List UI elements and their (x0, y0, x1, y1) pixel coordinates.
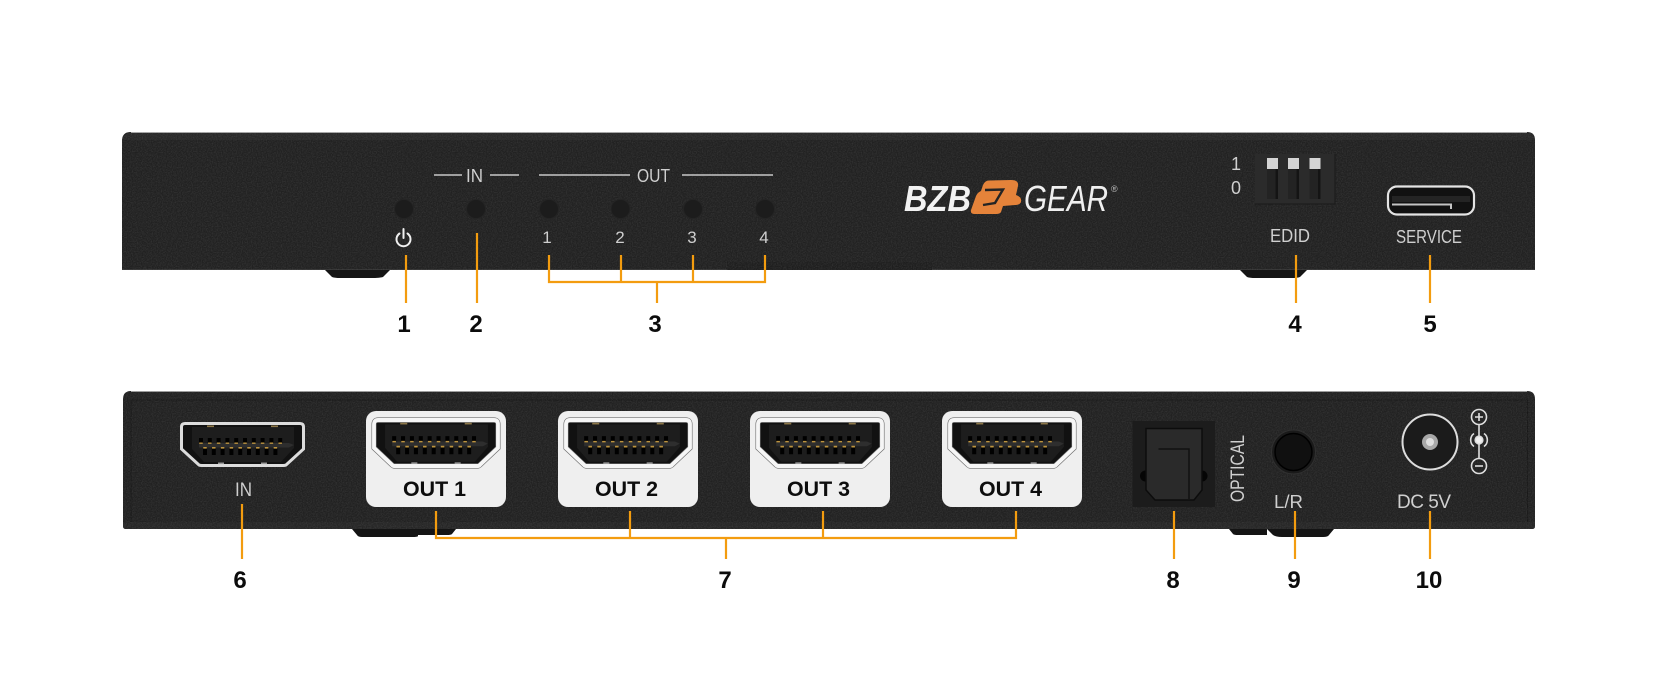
callout 10 (1416, 511, 1442, 594)
logo: BZB 2 GEAR: BZB (904, 178, 971, 219)
callout 8: 8 (1166, 567, 1180, 594)
callout 8 (1166, 511, 1180, 594)
icon: power (397, 229, 410, 246)
service USB port (1388, 186, 1474, 214)
DC power jack (1402, 414, 1458, 470)
card: OUT 1 (366, 411, 506, 507)
callout 6 (233, 504, 247, 594)
IN group label (434, 166, 519, 186)
callout 7: 7 (718, 567, 732, 594)
callout 3: 3 (648, 311, 662, 338)
output numbers: 1 (542, 228, 552, 247)
callout 5 (1423, 255, 1437, 338)
IN group label: IN (466, 166, 483, 186)
callout 9 (1287, 511, 1301, 594)
DIP switch scale (1231, 154, 1241, 198)
logo: BZB 2 GEAR (904, 178, 1118, 219)
callout 1 (397, 255, 411, 338)
panel: rear of device (123, 391, 1535, 537)
callout 5: 5 (1423, 311, 1437, 338)
card: OUT 2: OUT 2 (595, 478, 658, 501)
optical port (1132, 421, 1215, 507)
card: OUT 1: OUT 1 (403, 478, 466, 501)
card: OUT 4 (942, 411, 1082, 507)
L/R label: L/R (1274, 492, 1303, 512)
HDMI input port (182, 424, 304, 466)
callout 9: 9 (1287, 567, 1301, 594)
icon: polarity (1471, 410, 1487, 474)
callout 4 (1288, 255, 1302, 338)
IN label: IN (235, 480, 252, 501)
output numbers (542, 228, 769, 247)
SERVICE label: SERVICE (1396, 227, 1462, 247)
panel: front of device (122, 132, 1535, 278)
card: OUT 2 (558, 411, 698, 507)
callout 3 (549, 255, 765, 338)
card: OUT 3: OUT 3 (787, 478, 850, 501)
OUT group label: OUT (637, 166, 670, 186)
DIP switch scale: 0 (1231, 178, 1241, 198)
callouts: front (397, 233, 1437, 338)
output numbers: 2 (615, 228, 625, 247)
EDID label: EDID (1270, 226, 1310, 246)
logo: BZB 2 GEAR: ® (1111, 184, 1118, 194)
OPTICAL label: OPTICAL (1228, 435, 1249, 502)
callout 2: 2 (469, 311, 483, 338)
callouts: rear (233, 504, 1442, 594)
audio jack (1272, 430, 1316, 474)
callout 4: 4 (1288, 311, 1302, 338)
output numbers: 3 (687, 228, 697, 247)
output numbers: 4 (759, 228, 769, 247)
DIP switch (1255, 154, 1335, 204)
LED indicators (394, 200, 774, 218)
callout 7 (436, 511, 1016, 594)
device feet (325, 270, 1307, 278)
front chassis (122, 132, 1535, 270)
callout 10: 10 (1416, 567, 1442, 594)
rear chassis (123, 391, 1535, 529)
logo: BZB 2 GEAR: GEAR (1024, 178, 1108, 219)
card: OUT 3 (750, 411, 890, 507)
rear device feet (352, 529, 1334, 537)
callout 6: 6 (233, 567, 247, 594)
card: OUT 4: OUT 4 (979, 478, 1042, 501)
callout 2 (469, 233, 483, 338)
callout 1: 1 (397, 311, 411, 338)
DIP switch scale: 1 (1231, 154, 1241, 174)
DC 5V label: DC 5V (1397, 492, 1451, 513)
